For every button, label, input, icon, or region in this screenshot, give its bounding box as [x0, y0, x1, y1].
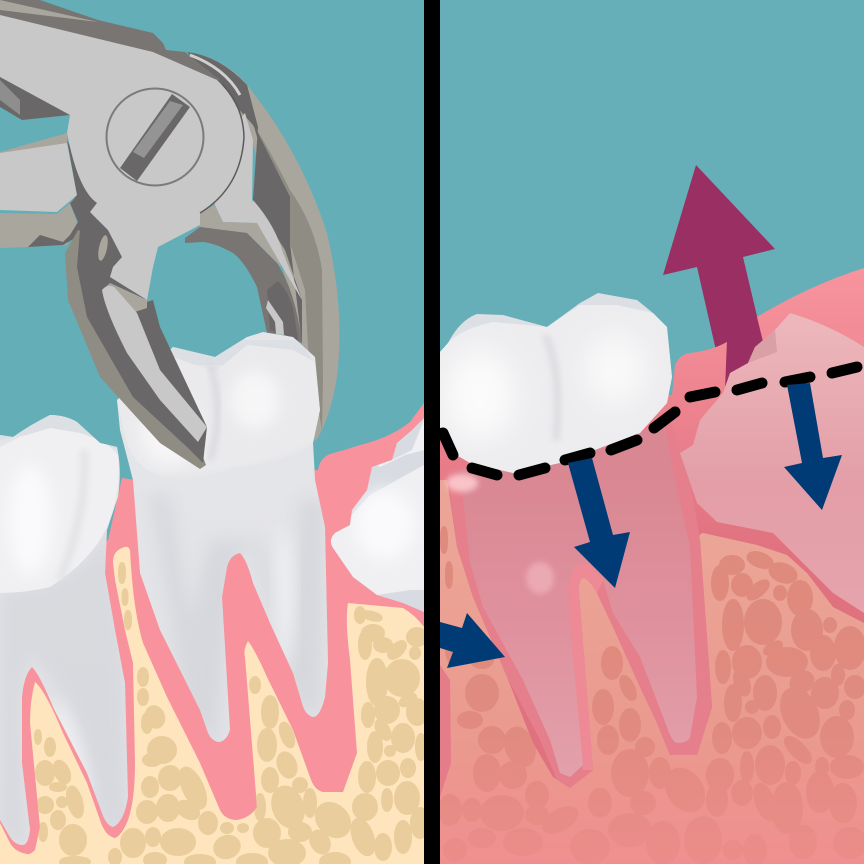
gum: left [0, 403, 424, 864]
arrow: left (blue) [440, 613, 505, 668]
tooth: right wisdom tooth [330, 418, 424, 612]
forceps front jaw outer [65, 230, 206, 469]
tooth root: extracted tooth under gum [460, 427, 697, 777]
arrow: down right (blue) [784, 383, 842, 510]
tooth: right wisdom tooth under gum [680, 313, 864, 613]
tooth: left molar [0, 410, 135, 860]
bone pores: left [36, 564, 428, 864]
cusp shadow on wisdom tooth [748, 330, 777, 363]
panel: left, forceps gripping tooth [0, 0, 428, 864]
forceps top edge [0, 0, 220, 80]
dashed cut line [443, 367, 857, 475]
tooth: centre molar being extracted [110, 330, 335, 750]
forceps joint body [0, 15, 243, 300]
forceps: rear arm [185, 52, 339, 442]
bone: right [440, 480, 864, 864]
panel: right, extraction forces [440, 0, 864, 864]
glow near gum line [446, 474, 478, 492]
tooth: extracted molar crown [440, 290, 675, 480]
highlight on root [526, 562, 554, 594]
bone pores: right [440, 528, 864, 864]
forceps notch under joint [198, 205, 223, 227]
forceps screw [106, 88, 204, 186]
forceps joint rim [200, 84, 244, 213]
background: left teal [0, 0, 424, 864]
tooth root outline strip: right [447, 420, 712, 788]
forceps dark wedge beside joint [67, 140, 100, 214]
background: right teal [440, 0, 864, 864]
forceps front jaw face [102, 286, 207, 442]
forceps: handles and front jaw [0, 0, 244, 469]
forceps lower handle [0, 133, 67, 156]
arrow: down centre (blue) [568, 458, 630, 588]
strip lighter at root fork [568, 563, 603, 770]
gum: right [440, 268, 864, 864]
forceps upper handle underside [0, 72, 70, 120]
purple shaft over gum [725, 317, 765, 390]
divider [424, 0, 440, 864]
gum strip around left root [440, 665, 451, 797]
bone: left [0, 547, 428, 864]
arrow: upward pull (purple) [663, 165, 775, 390]
